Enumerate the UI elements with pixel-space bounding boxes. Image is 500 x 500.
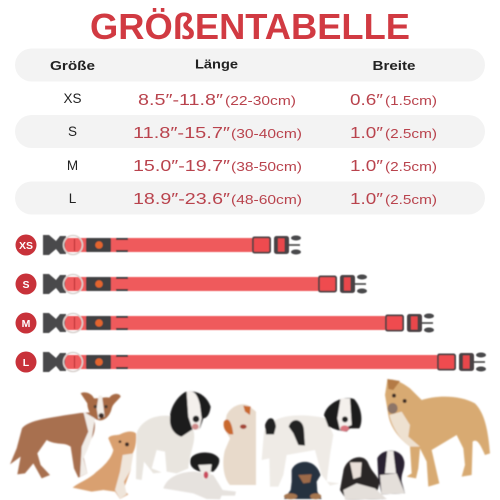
row M: 1.0″ [350, 158, 383, 175]
dog: small black and white lying [163, 452, 236, 499]
row L: (48-60cm) [231, 192, 302, 207]
dog: small tan long-haired [73, 431, 136, 499]
title: GRÖßENTABELLE [90, 6, 410, 47]
row S [15, 115, 485, 148]
header row: Länge [195, 56, 238, 72]
collar M [16, 312, 434, 334]
dog: black and white spotted large puppy [262, 398, 361, 487]
dog: white with black head, standing [136, 391, 211, 480]
row S: (2.5cm) [385, 126, 437, 141]
table: size chart [15, 48, 485, 214]
row S: S [68, 124, 77, 139]
header row [15, 48, 485, 82]
row M: M [67, 158, 78, 173]
row XS: XS [63, 91, 82, 106]
dog: curly white and orange [223, 404, 256, 485]
row L: (2.5cm) [385, 192, 437, 207]
row XS: 8.5″-11.8″ [138, 92, 223, 109]
header row: Größe [50, 58, 95, 73]
collar XS: XS [19, 240, 33, 252]
collar S: S [22, 279, 30, 291]
collar XS [16, 234, 301, 256]
dogs: two spaniels [340, 451, 405, 500]
row XS: (22-30cm) [225, 93, 296, 108]
collar M: M [22, 318, 31, 330]
photo: group of dogs [10, 379, 490, 500]
collar S [16, 274, 367, 294]
row L: 1.0″ [350, 191, 383, 208]
row XS: 0.6″ [350, 92, 383, 109]
row S: 1.0″ [350, 125, 383, 142]
row M: (38-50cm) [231, 159, 302, 174]
header row: Breite [372, 58, 416, 73]
row L [15, 182, 485, 214]
dog: brown and white puppy [10, 392, 121, 478]
row M: 15.0″-19.7″ [133, 158, 230, 175]
row XS: (1.5cm) [385, 93, 437, 108]
row S: 11.8″-15.7″ [133, 125, 230, 142]
dog: small black and tan sitting [284, 462, 322, 499]
row M [67, 158, 437, 175]
row M: (2.5cm) [385, 159, 437, 174]
collar L [16, 352, 486, 372]
row S: (30-40cm) [231, 126, 302, 141]
collar L: L [23, 357, 30, 369]
dog: large golden [385, 379, 490, 487]
row XS [63, 91, 437, 109]
row L: 18.9″-23.6″ [133, 191, 230, 208]
row L: L [69, 191, 77, 206]
